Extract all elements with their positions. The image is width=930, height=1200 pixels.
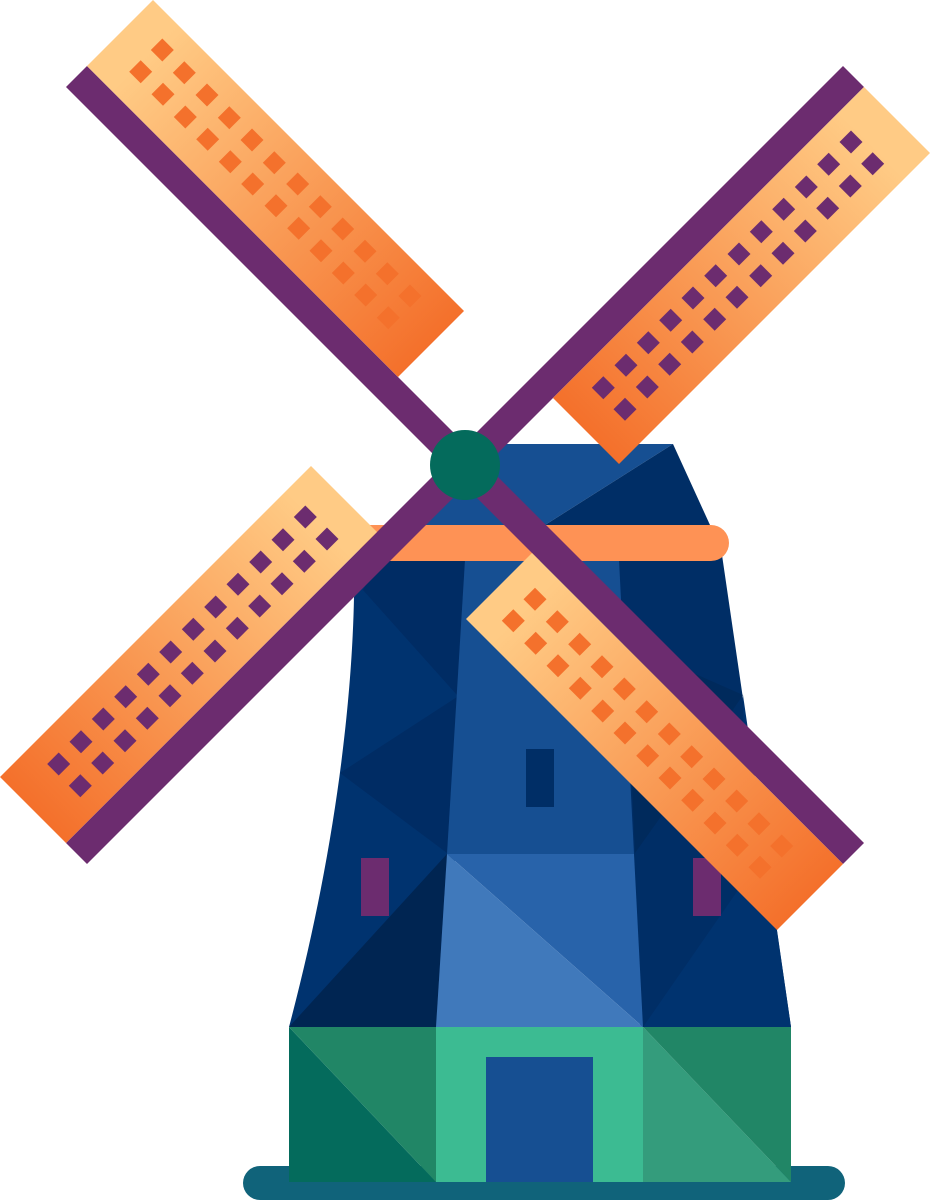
hub (430, 430, 500, 500)
blade holes (47, 506, 338, 797)
tower front panel (447, 560, 634, 854)
green base of the mill (289, 1027, 791, 1182)
blade holes (129, 38, 421, 329)
tower left side (289, 555, 470, 1027)
cap of the mill (400, 444, 673, 525)
blade: top left (87, 0, 464, 377)
tower body (289, 444, 791, 1027)
ground rail (243, 1166, 845, 1200)
blade holes (502, 588, 793, 879)
blade: bottom right (466, 553, 843, 930)
right window (693, 858, 721, 916)
blade: top right (553, 87, 930, 464)
centre window (526, 749, 554, 807)
orange band (360, 525, 729, 561)
windmill arms (66, 66, 864, 864)
left window (361, 858, 389, 916)
blade: bottom left (0, 466, 377, 843)
tower right side (615, 555, 791, 1027)
door (486, 1057, 593, 1182)
blade holes (592, 130, 884, 421)
